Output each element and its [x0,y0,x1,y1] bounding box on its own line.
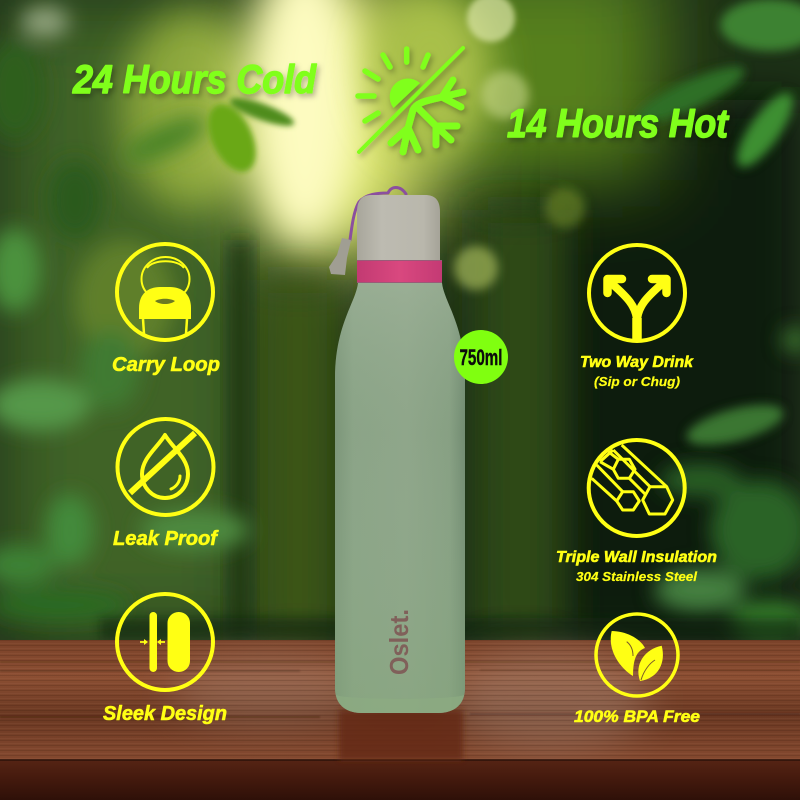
wooden table [0,640,800,800]
icon: two-way arrows [589,245,685,341]
left foliage [0,6,250,621]
feature: leak proof [113,419,219,550]
heading: 24 hours cold: 24 Hours Cold [72,58,317,102]
feature: carry loop [112,244,220,376]
feature: bpa free [574,614,700,726]
icon: hexagon tubes [589,440,685,536]
cap [357,195,440,260]
background: blurred forest [0,0,800,640]
brand name: Oslet. [384,609,414,675]
pink band [357,260,442,283]
icon: leaves [596,614,678,696]
label: bpa free: 100% BPA Free [574,707,700,726]
feature: two way drink [580,245,694,389]
icon: slim bottle [117,594,213,690]
heading: 14 hours hot: 14 Hours Hot [507,102,729,146]
bottle reflection [339,710,463,760]
capacity badge [454,330,508,384]
icon: sun and snowflake [358,48,463,152]
label: carry loop: Carry Loop [112,354,220,376]
strap tab [329,238,351,275]
carry strap [350,188,406,240]
icon: carry loop [117,244,213,340]
label: leak proof: Leak Proof [113,528,219,550]
label: triple wall insulation: Triple Wall Insulation [556,549,717,566]
right foliage [630,0,800,453]
feature: triple wall insulation [556,440,717,584]
label: stainless steel: 304 Stainless Steel [576,569,697,584]
icon: no drop [118,419,214,515]
label: sip or chug: (Sip or Chug) [594,374,680,389]
bottle [329,188,465,713]
leaf near heading [206,94,298,176]
feature: sleek design [103,594,227,725]
label: two way drink: Two Way Drink [580,354,694,371]
label: sleek design: Sleek Design [103,703,227,725]
capacity badge: 750ml [460,345,502,370]
bottle body [335,283,465,713]
